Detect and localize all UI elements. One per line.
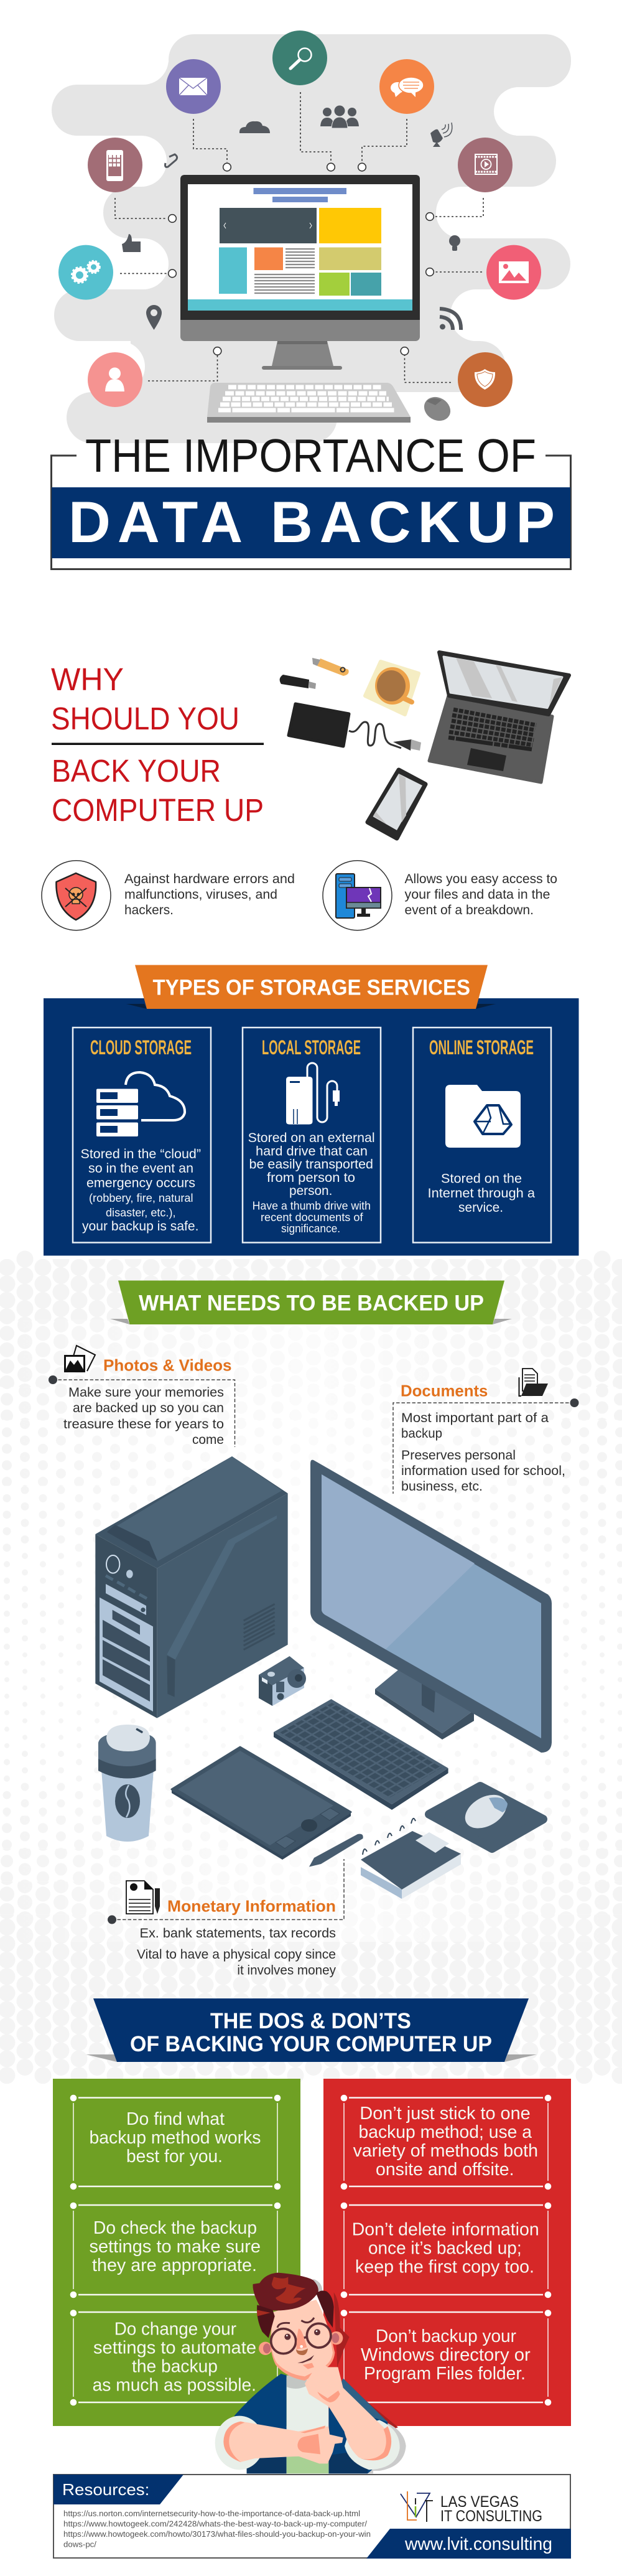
callout: photos and videos (49, 1346, 235, 1447)
resource links: https://us.norton.com/internetsecurity-how-to-the-importance-of-data-back-up.html (63, 2509, 360, 2518)
don't 3: Windows directory or (361, 2345, 531, 2365)
card: cloud storage: emergency occurs (86, 1175, 195, 1190)
don't 1: variety of methods both (353, 2141, 538, 2161)
callout: photos and videos: are backed up so you can (73, 1400, 224, 1415)
banner: what needs to be backed up: WHAT NEEDS TO BE BACKED UP (139, 1291, 484, 1316)
icon: certificate (126, 1881, 160, 1914)
icon: satellite (430, 123, 452, 147)
do 3: as much as possible. (93, 2376, 256, 2396)
hair (253, 2273, 318, 2310)
icon: smartphone (88, 138, 142, 192)
callout: photos and videos: come (192, 1432, 224, 1447)
logo: LAS VEGAS (440, 2493, 519, 2511)
hero illustration: computer with connected icons (0, 25, 622, 443)
footer resources panel (53, 2475, 571, 2559)
banner: types of storage services: TYPES OF STORAGE SERVICES (153, 975, 470, 1000)
section: why back up heading: SHOULD YOU (51, 701, 239, 736)
title frame (51, 456, 571, 569)
icon: people (320, 106, 359, 128)
icon: shield (458, 352, 513, 407)
icon: rss (440, 309, 461, 330)
card: cloud storage: CLOUD STORAGE (90, 1036, 192, 1059)
title line 2: DATA BACKUP (68, 489, 555, 555)
card: local storage: from person to (267, 1170, 355, 1185)
panel: don'ts (323, 2079, 571, 2426)
gray cloud backdrop (0, 25, 622, 443)
head (253, 2273, 343, 2398)
icon: danger shield (42, 861, 111, 930)
do 1 (70, 2095, 281, 2190)
do 1: backup method works (90, 2128, 261, 2148)
reason text: your files and data in the (404, 887, 550, 902)
icon: hard drive and cable (289, 704, 421, 751)
title band (52, 487, 570, 558)
computer tower (95, 1456, 288, 1718)
section: why back up heading (51, 662, 264, 828)
section: why back up heading: COMPUTER UP (52, 792, 264, 828)
tablet (172, 1747, 351, 1860)
card: cloud storage: so in the event an (88, 1161, 193, 1176)
chin finger (305, 2359, 342, 2398)
card: online storage: Internet through a (428, 1186, 535, 1201)
icon: picture (486, 245, 541, 300)
icon: coffee (365, 662, 419, 714)
icon: search (272, 30, 327, 85)
icon: email (166, 59, 221, 114)
logo: IT CONSULTING (440, 2508, 542, 2525)
reason: hardware errors (42, 861, 295, 930)
card: local storage: person. (289, 1183, 332, 1198)
callout: photos and videos: treasure these for years to (63, 1417, 224, 1431)
mouse pad (429, 1786, 543, 1848)
mouse (420, 392, 455, 426)
title line 1: THE IMPORTANCE OF (85, 429, 536, 482)
card: local storage: LOCAL STORAGE (262, 1036, 361, 1059)
resources tab (53, 2475, 183, 2504)
don't 3: Program Files folder. (364, 2364, 526, 2384)
reason: easy access (323, 861, 557, 930)
icon: broken computer (323, 861, 392, 930)
do 2: Do check the backup (93, 2218, 257, 2238)
reason text (124, 871, 295, 917)
banner: what needs to be backed up (110, 1281, 512, 1324)
connector rings (169, 163, 434, 355)
card: online storage: ONLINE STORAGE (429, 1036, 534, 1059)
callout: monetary information (108, 1859, 344, 1978)
callout: monetary information: Ex. bank statements, tax records (139, 1926, 336, 1941)
icon: bulb (449, 235, 460, 251)
card: local storage: Have a thumb drive with (253, 1200, 371, 1212)
don't 2 (341, 2203, 551, 2298)
card: online storage (413, 1028, 551, 1242)
small gray icons (122, 106, 461, 330)
right arm (305, 2367, 400, 2470)
don't 2: Don’t delete information (352, 2220, 539, 2240)
callout: documents: Most important part of a (401, 1410, 549, 1425)
do 3: the backup (132, 2357, 218, 2377)
callout: documents: Documents (401, 1382, 488, 1400)
icon: gears (58, 245, 113, 300)
don't 2: keep the first copy too. (355, 2257, 534, 2277)
background dot pattern (0, 1251, 622, 2076)
resource links: https://www.howtogeek.com/howto/30173/what-files-should-you-backup-on-your-win (63, 2529, 371, 2539)
callout: photos and videos: Make sure your memories (68, 1385, 224, 1400)
reason text: event of a breakdown. (404, 902, 534, 917)
icon: external drive (286, 1063, 340, 1125)
banner: dos and don'ts: OF BACKING YOUR COMPUTER UP (130, 2031, 492, 2056)
panel: types of storage services (44, 965, 578, 1256)
card: cloud storage: (robbery, fire, natural (89, 1192, 193, 1204)
nose and mouth (297, 2329, 307, 2349)
don't 1 (341, 2095, 551, 2190)
monitor (180, 175, 420, 370)
callout: documents: information used for school, (401, 1463, 565, 1478)
logo (401, 2491, 542, 2525)
character: thinking man (215, 2273, 406, 2473)
shirt (287, 2377, 328, 2473)
callout: documents: Preserves personal (401, 1448, 516, 1463)
icon: chat (379, 59, 434, 114)
desk illustration (280, 652, 569, 838)
coffee bottle (98, 1725, 156, 1842)
callout: photos and videos: Photos & Videos (103, 1356, 231, 1374)
monitor (310, 1460, 552, 1753)
reason text: malfunctions, viruses, and (124, 887, 277, 902)
callout: monetary information: Monetary Information (167, 1896, 336, 1915)
icon: phone (368, 770, 425, 838)
callout: documents (393, 1369, 578, 1494)
don't 3: Don’t backup your (376, 2326, 516, 2346)
reason text: hackers. (124, 902, 174, 917)
card: cloud storage: disaster, etc.), (106, 1206, 175, 1219)
section: why back up heading: BACK YOUR (52, 753, 221, 789)
keyboard (207, 383, 411, 423)
do 3: settings to automate (93, 2338, 256, 2358)
neck (287, 2376, 307, 2389)
icon: cloud server (96, 1072, 185, 1136)
camera (259, 1656, 306, 1706)
banner: types of storage services (135, 965, 488, 1009)
website tab (366, 2529, 571, 2559)
card: local storage: recent documents of (261, 1211, 364, 1224)
resources tab: Resources: (62, 2480, 149, 2499)
section: why back up heading: WHY (51, 662, 124, 697)
shadow (334, 2292, 398, 2432)
resource links: dows-pc/ (63, 2540, 96, 2549)
card: local storage: significance. (281, 1222, 340, 1235)
callout: documents: backup (401, 1426, 442, 1441)
icon: laptop (429, 652, 569, 782)
icon: link (165, 154, 177, 167)
don't 1: Don’t just stick to one (360, 2104, 531, 2124)
isometric desktop illustration (95, 1456, 552, 1899)
reason text: Allows you easy access to (404, 871, 557, 886)
icon: thumbs up (122, 234, 141, 252)
title block (51, 429, 571, 569)
reason text (404, 871, 557, 917)
banner shadow (126, 1004, 496, 1009)
callout: documents: business, etc. (401, 1479, 483, 1494)
card: local storage: be easily transported (249, 1156, 373, 1171)
do 2: they are appropriate. (92, 2255, 257, 2275)
icon: drive folder (445, 1085, 521, 1148)
left arm (215, 2416, 343, 2470)
callout: monetary information: it involves money (237, 1963, 336, 1978)
icon: photos (64, 1346, 95, 1372)
notebook (361, 1819, 461, 1899)
icon: cloud (239, 121, 270, 133)
icon: user (88, 352, 142, 407)
glasses (271, 2323, 331, 2354)
icon: document folder (519, 1369, 548, 1396)
card: cloud storage: Stored in the “cloud” (81, 1146, 201, 1161)
do 2 (70, 2203, 281, 2298)
banner: dos and don'ts (86, 1998, 537, 2062)
icon: black usb (280, 675, 316, 689)
panel: dos (53, 2079, 300, 2426)
do 2: settings to make sure (90, 2237, 261, 2257)
do 3 (70, 2310, 277, 2405)
card: cloud storage: your backup is safe. (82, 1219, 199, 1234)
reason text: Against hardware errors and (124, 871, 295, 886)
keyboard (274, 1699, 448, 1810)
eyebrows (277, 2318, 314, 2328)
card: cloud storage (73, 1028, 211, 1242)
card: local storage: hard drive that can (256, 1144, 368, 1159)
icon: location pin (146, 305, 162, 330)
monitor stand (375, 1668, 474, 1733)
icon: orange usb (312, 658, 349, 676)
don't 1: backup method; use a (358, 2122, 532, 2142)
do 3: Do change your (114, 2320, 236, 2339)
do 1: best for you. (126, 2147, 223, 2166)
icon: film (458, 138, 513, 192)
resource links: https://www.howtogeek.com/242428/whats-the-best-way-to-back-up-my-computer/ (63, 2519, 367, 2528)
dotted connectors (115, 92, 483, 382)
card: local storage (243, 1028, 381, 1242)
banner: dos and don'ts: THE DOS & DON’TS (210, 2008, 411, 2033)
eyes (284, 2334, 290, 2340)
card: local storage: Stored on an external (248, 1130, 375, 1145)
do 1: Do find what (126, 2109, 225, 2129)
callout: monetary information: Vital to have a physical copy since (137, 1947, 336, 1962)
card: online storage: service. (458, 1200, 503, 1215)
stylus (309, 1834, 363, 1867)
don't 3 (341, 2310, 551, 2405)
don't 2: once it’s backed up; (368, 2239, 522, 2259)
don't 1: onsite and offsite. (376, 2160, 514, 2180)
website tab: www.lvit.consulting (404, 2534, 552, 2554)
card: online storage: Stored on the (441, 1171, 522, 1186)
jacket (234, 2374, 388, 2473)
resource links (63, 2509, 371, 2549)
